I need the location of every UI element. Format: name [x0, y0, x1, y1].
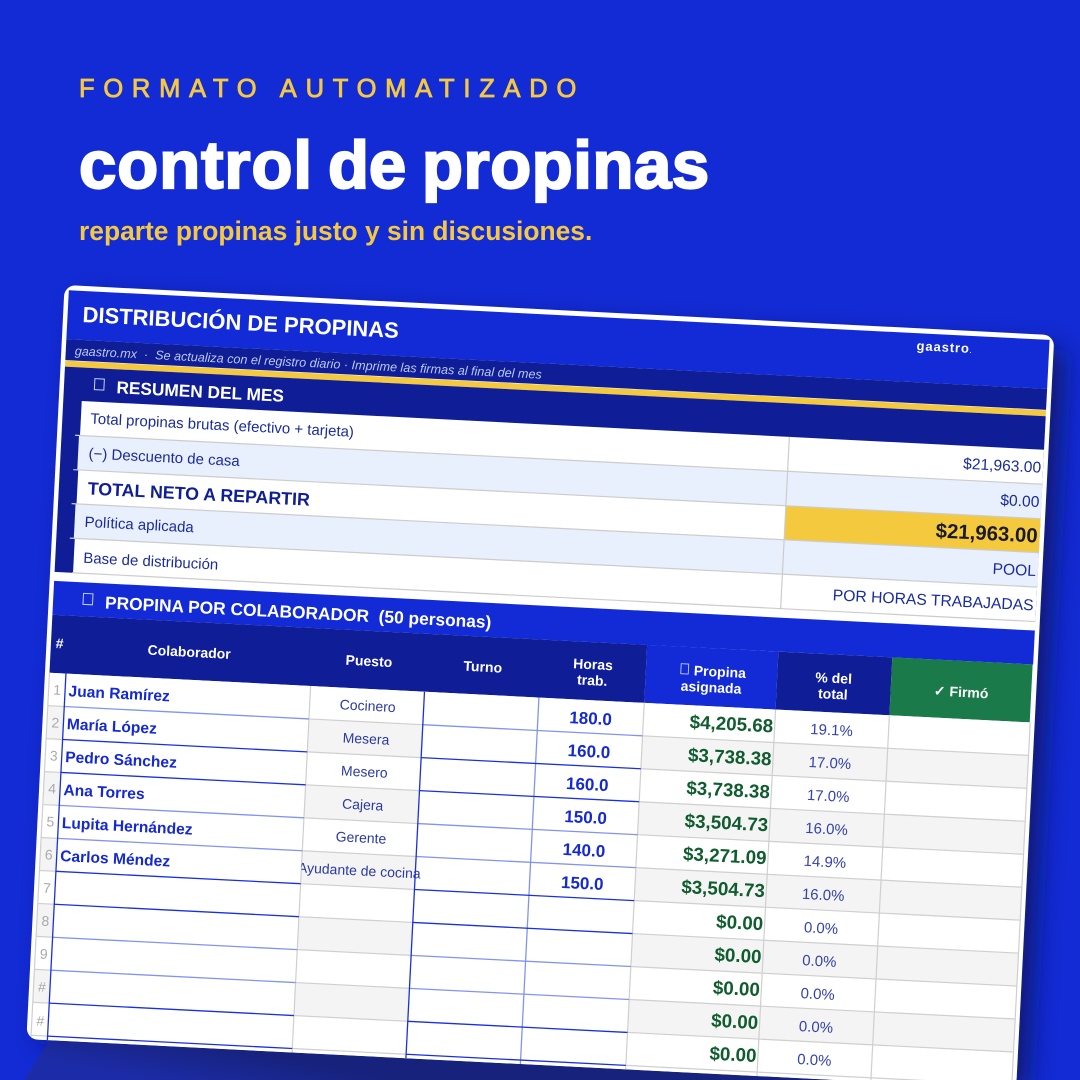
- collaborator names: Pedro Sánchez: [65, 749, 177, 772]
- hours worked: 150.0: [564, 807, 607, 828]
- percent of total: 17.0%: [808, 754, 852, 773]
- hours worked: 160.0: [567, 741, 611, 762]
- table header: total: [818, 685, 848, 703]
- spreadsheet card: [26, 285, 1054, 1080]
- row numbers: #: [38, 979, 47, 995]
- job titles: Gerente: [335, 828, 387, 847]
- assigned tips: $3,504.73: [681, 876, 765, 901]
- summary rows: Total propinas brutas (efectivo + tarjeta): [90, 410, 354, 441]
- section heading: RESUMEN DEL MES: [116, 377, 285, 406]
- assigned tips: $0.00: [711, 1010, 759, 1033]
- collaborator names: Lupita Hernández: [61, 815, 193, 839]
- assigned tips: $3,504.73: [684, 810, 769, 835]
- assigned tips: $0.00: [712, 977, 760, 1000]
- row numbers: [36, 681, 62, 1029]
- hours worked: 140.0: [562, 840, 606, 861]
- eyebrow heading: FORMATO AUTOMATIZADO: [79, 75, 585, 103]
- assigned tips: $3,271.09: [683, 843, 767, 868]
- row numbers: 2: [51, 714, 60, 731]
- percent of total: [798, 724, 852, 1066]
- percent of total: 19.1%: [810, 721, 853, 740]
- yellow stripe: [65, 361, 1046, 416]
- table header: Colaborador: [147, 642, 232, 662]
- assigned tips: $3,738.38: [688, 744, 772, 769]
- summary rows: Base de distribución: [83, 550, 219, 574]
- row numbers: #: [36, 1013, 45, 1029]
- table header: Propina: [693, 662, 747, 681]
- assigned tips: $3,738.38: [686, 777, 770, 802]
- subtitle: reparte propinas justo y sin discusiones.: [79, 216, 592, 246]
- row numbers: 1: [53, 681, 62, 698]
- assigned tips: $4,205.68: [689, 711, 774, 736]
- row numbers: 9: [39, 946, 48, 962]
- table header: Puesto: [345, 652, 393, 670]
- hours worked: 150.0: [561, 873, 604, 894]
- section heading: PROPINA POR COLABORADOR (50 personas): [105, 592, 492, 632]
- header band: [66, 290, 1050, 389]
- collaborator names: María López: [66, 716, 157, 738]
- table header: #: [55, 635, 64, 651]
- hours worked: [561, 708, 612, 894]
- table body: [31, 673, 1030, 1080]
- percent of total: 0.0%: [802, 952, 837, 971]
- summary rows: [68, 401, 1044, 622]
- icon: missing glyph box: [83, 593, 93, 605]
- row numbers: 8: [41, 913, 50, 929]
- job titles: Mesero: [341, 762, 388, 781]
- table header: Horas: [573, 655, 614, 673]
- table header: asignada: [680, 678, 742, 697]
- collaborator names: [60, 683, 200, 872]
- main title: de: [328, 128, 406, 203]
- sheet title: DISTRIBUCIÓN DE PROPINAS: [82, 302, 399, 343]
- percent of total: 14.9%: [803, 853, 847, 872]
- summary rows: POOL: [992, 561, 1037, 580]
- percent of total: 0.0%: [797, 1051, 832, 1070]
- logo: gaastro.: [916, 338, 973, 356]
- percent of total: 16.0%: [805, 820, 848, 839]
- percent of total: 0.0%: [798, 1018, 834, 1037]
- row numbers: 5: [46, 813, 55, 830]
- table header: trab.: [577, 671, 608, 689]
- hours worked: 160.0: [566, 774, 609, 795]
- main title: control: [79, 128, 313, 203]
- subtitle band: gaastro.mx · Se actualiza con el registro diario · Imprime las firmas al final del mes: [74, 344, 543, 382]
- job titles: [301, 700, 420, 878]
- percent of total: 0.0%: [800, 985, 835, 1004]
- collaborator names: Carlos Méndez: [60, 848, 171, 871]
- assigned tips: $0.00: [716, 911, 764, 934]
- hours worked: 180.0: [569, 708, 612, 729]
- table header: [49, 615, 1033, 722]
- percent of total: 0.0%: [803, 919, 839, 938]
- collaborator names: Juan Ramírez: [68, 683, 170, 705]
- job titles: Ayudante de cocina: [298, 859, 421, 882]
- summary rows: TOTAL NETO A REPARTIR: [87, 478, 310, 510]
- assigned tips: [682, 714, 772, 1062]
- table header: ✓ Firmó: [934, 683, 989, 701]
- subtitle band: [65, 339, 1047, 410]
- summary rows: POR HORAS TRABAJADAS: [832, 587, 1034, 614]
- row numbers: 3: [49, 747, 58, 764]
- job titles: Mesera: [342, 729, 390, 748]
- icon: missing glyph box: [94, 379, 104, 390]
- table header: Turno: [463, 658, 503, 676]
- panel: resumen del mes: [55, 367, 1046, 622]
- summary rows: $21,963.00: [935, 520, 1038, 548]
- row numbers: 6: [44, 846, 53, 863]
- table header: % del: [815, 669, 852, 687]
- main title: propinas: [422, 128, 710, 203]
- job titles: Cocinero: [339, 696, 396, 715]
- summary rows: Política aplicada: [84, 514, 195, 536]
- collaborator names: Ana Torres: [63, 782, 145, 803]
- main title: [79, 128, 710, 203]
- summary rows: $21,963.00: [963, 456, 1042, 477]
- summary rows: (−) Descuento de casa: [88, 445, 241, 470]
- assigned tips: $0.00: [709, 1043, 757, 1066]
- panel: propina por colaborador: [31, 581, 1035, 1080]
- row numbers: 4: [48, 780, 57, 797]
- summary rows: $0.00: [1000, 492, 1040, 511]
- percent of total: 17.0%: [807, 787, 850, 806]
- job titles: Cajera: [342, 796, 384, 814]
- percent of total: 16.0%: [802, 886, 845, 905]
- row numbers: 7: [43, 880, 52, 896]
- card shadow: [24, 300, 1064, 1080]
- assigned tips: $0.00: [714, 944, 762, 967]
